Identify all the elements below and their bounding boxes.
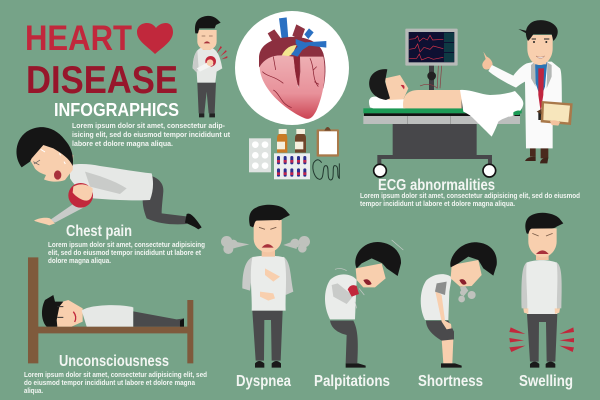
intro text xyxy=(72,121,230,148)
unconsciousness text: Lorem ipsum dolor sit amet, consectetur adipisicing elit, sed xyxy=(24,370,207,379)
swelling marks xyxy=(509,327,574,352)
chest pain text xyxy=(48,240,205,265)
figure: shortness of breath man xyxy=(421,242,497,368)
figure: doctor xyxy=(460,20,573,163)
chest pain heading: Chest pain xyxy=(66,223,132,240)
unconsciousness heading: Unconsciousness xyxy=(59,353,169,370)
chest pain text: dolore magna aliqua. xyxy=(48,256,111,265)
ECG heading: ECG abnormalities xyxy=(378,177,495,194)
chest pain text: Lorem ipsum dolor sit amet, consectetur adipisicing xyxy=(48,240,205,249)
figure: man unconscious on bed xyxy=(28,257,193,363)
icon: blister pack xyxy=(249,138,271,172)
icon: brown bottle xyxy=(295,129,306,153)
title: DISEASE xyxy=(26,59,178,102)
ECG text: tempor incididunt ut labore et dolore magna aliqua. xyxy=(360,199,515,208)
circle with heart xyxy=(235,11,349,125)
figure: palpitations man xyxy=(325,240,403,368)
icon: stethoscope xyxy=(313,160,339,180)
icon: heart xyxy=(137,23,173,54)
ECG text xyxy=(360,191,580,208)
figure: dyspnea man xyxy=(221,205,310,368)
icon: ECG monitor xyxy=(405,29,458,92)
white sheet xyxy=(460,90,523,137)
icon: orange bottle xyxy=(277,129,287,153)
shortness label: Shortness xyxy=(418,373,483,390)
swelling label: Swelling xyxy=(519,373,573,390)
dyspnea label: Dyspnea xyxy=(236,373,291,390)
patient xyxy=(369,69,472,108)
chest pain text: elit, sed do eiusmod tempor incididunt ut labore et xyxy=(48,248,201,257)
title: HEART xyxy=(25,19,132,58)
icon: pill pack xyxy=(274,153,310,179)
title: INFOGRAPHICS xyxy=(54,100,179,120)
figure: swelling man xyxy=(522,213,563,368)
figure: patient on ECG bed xyxy=(363,29,522,177)
unconsciousness text: aliqua. xyxy=(24,386,43,395)
figure: man with chest pain xyxy=(16,127,202,229)
bed frame xyxy=(28,257,193,363)
unconsciousness text xyxy=(24,370,207,395)
clipboard held by doctor xyxy=(537,101,573,126)
unconsciousness text: do eiusmod tempor incididunt ut labore et dolore magna xyxy=(24,378,196,387)
figure: standing man holding chest xyxy=(193,16,227,117)
lying man xyxy=(42,295,184,327)
title xyxy=(25,19,179,120)
smoke xyxy=(221,236,310,254)
icon: clipboard xyxy=(317,127,339,157)
intro text: labore et dolore magna aliqua. xyxy=(72,139,173,148)
intro text: isicing elit, sed do eiusmod tempor incididunt ut xyxy=(72,130,230,139)
icon: anatomical heart xyxy=(259,17,326,119)
palpitations label: Palpitations xyxy=(314,373,390,390)
intro text: Lorem ipsum dolor sit amet, consectetur adip- xyxy=(72,121,225,130)
medicine and tools xyxy=(249,127,339,180)
bed xyxy=(363,108,522,177)
